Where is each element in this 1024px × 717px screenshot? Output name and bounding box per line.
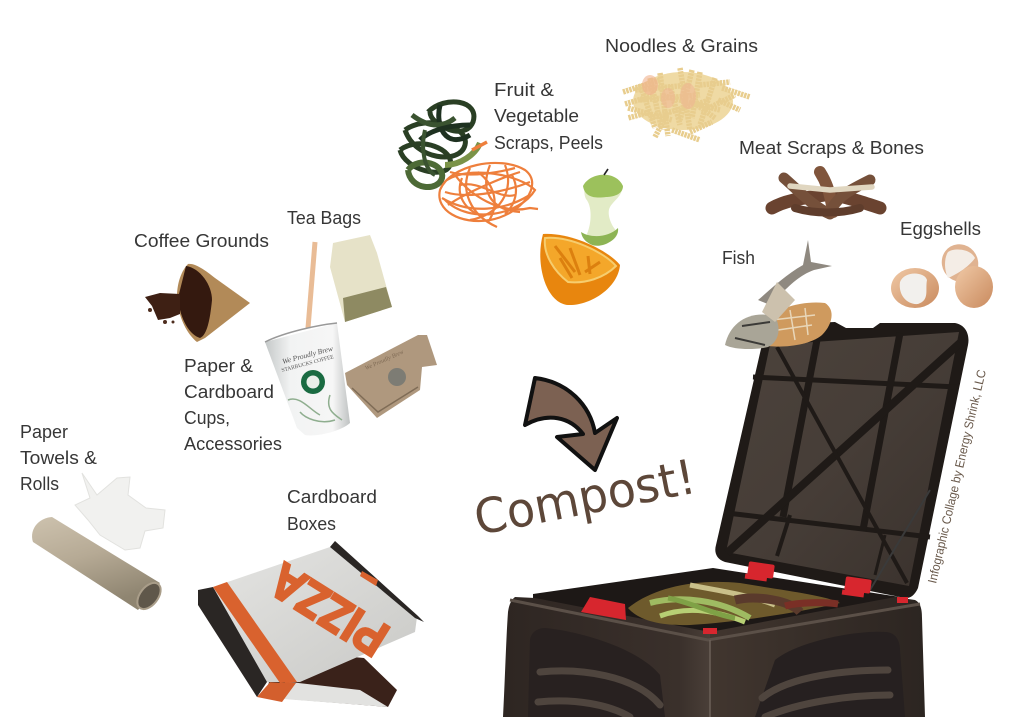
bin rim highlight xyxy=(510,600,920,640)
icon: apple core xyxy=(581,169,623,246)
icon: crumpled tissue xyxy=(75,473,165,550)
icon: cardboard sleeve xyxy=(345,335,437,418)
label: fruit and vegetable scraps, peels: Vegetable xyxy=(494,105,579,126)
label: coffee grounds: Coffee Grounds xyxy=(134,230,269,251)
label: paper and cardboard cups, accessories xyxy=(184,355,282,454)
bin left panel with ribs xyxy=(528,628,665,717)
red latches xyxy=(581,561,908,634)
icon: noodles xyxy=(623,68,750,140)
label: cardboard boxes: Boxes xyxy=(287,513,336,534)
icon: bones xyxy=(772,172,880,214)
icon: paper coffee cup: We Proudly Brew xyxy=(281,344,334,366)
label: meat scraps and bones: Meat Scraps & Bones xyxy=(739,137,924,158)
label: noodles and grains: Noodles & Grains xyxy=(605,35,758,56)
label: paper towels and rolls: Paper xyxy=(20,421,68,442)
heading: compost: Compost! xyxy=(470,449,700,547)
label: eggshells: Eggshells xyxy=(900,218,981,239)
icon: pizza box xyxy=(198,541,424,707)
icon: coffee filter and grounds xyxy=(145,264,250,342)
credit: Infographic Collage by Energy Shrink, LLC xyxy=(925,368,989,585)
label: paper towels and rolls xyxy=(20,421,98,494)
icon: paper coffee cup xyxy=(265,323,350,435)
bin right face xyxy=(710,597,925,717)
label: paper towels and rolls: Towels & xyxy=(20,447,98,468)
label: fruit and vegetable scraps, peels: Scraps, Peels xyxy=(494,132,603,153)
icon: cardboard roll xyxy=(32,517,165,613)
icon: tea bag and stir stick xyxy=(308,235,392,328)
icon: shredded carrot xyxy=(439,142,538,227)
icon: cardboard sleeve: We Proudly Brew xyxy=(364,349,405,372)
bin right panel with ribs xyxy=(755,632,905,717)
icon: cucumber peels xyxy=(400,102,480,187)
icon: pizza box: PIZZA xyxy=(260,552,398,667)
label: fish: Fish xyxy=(722,247,755,268)
arrow xyxy=(525,378,617,470)
compost bin xyxy=(503,322,968,717)
label: fruit and vegetable scraps, peels: Fruit & xyxy=(494,79,555,100)
label: fruit and vegetable scraps, peels xyxy=(494,79,603,153)
label: paper towels and rolls: Rolls xyxy=(20,473,59,494)
icon: squeezed orange half xyxy=(540,234,620,305)
label: tea bags: Tea Bags xyxy=(287,207,361,228)
label: paper and cardboard cups, accessories: Cups, xyxy=(184,407,230,428)
icon: paper coffee cup: STARBUCKS COFFEE xyxy=(281,354,335,374)
icon: eggshells xyxy=(891,238,993,308)
label: paper and cardboard cups, accessories: Cardboard xyxy=(184,381,274,402)
compost food scraps xyxy=(628,582,840,625)
label: cardboard boxes: Cardboard xyxy=(287,486,377,507)
label: paper and cardboard cups, accessories: Paper & xyxy=(184,355,254,376)
icon: fish skeleton xyxy=(725,240,832,349)
bin left face xyxy=(503,597,710,717)
label: paper and cardboard cups, accessories: Accessories xyxy=(184,433,282,454)
label: cardboard boxes xyxy=(287,486,377,534)
lid xyxy=(715,322,968,598)
